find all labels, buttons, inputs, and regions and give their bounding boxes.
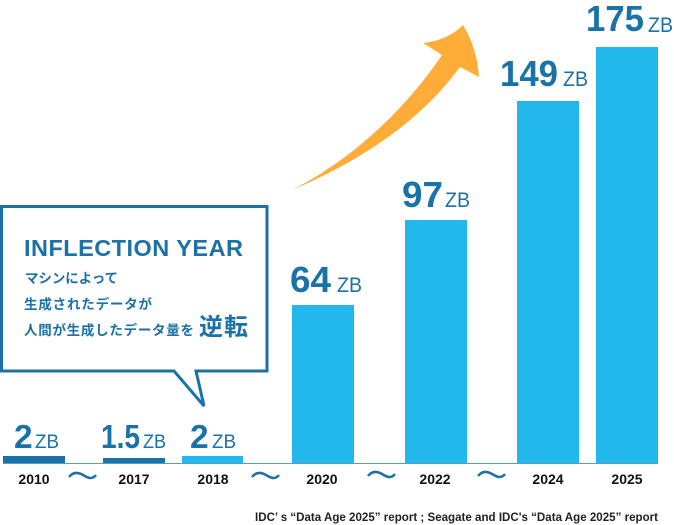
- value label: 2022: 97: [402, 174, 443, 215]
- value label: 2017: 1.5: [101, 419, 140, 456]
- callout heading: INFLECTION YEAR: [24, 235, 243, 261]
- year labels: 2010: [18, 471, 50, 487]
- bar chart: [3, 47, 658, 463]
- callout text: マシンによって: [25, 271, 118, 286]
- value label: 2020: 64: [290, 259, 331, 300]
- value label: 2010: [14, 419, 59, 456]
- year labels: 2020: [306, 471, 338, 487]
- value label: 2022: [402, 174, 470, 215]
- source note: IDC’ s “Data Age 2025” report ; Seagate and IDC's “Data Age 2025” report: [255, 510, 658, 524]
- value label: 2010: ZB: [35, 432, 59, 453]
- callout: [2, 206, 267, 406]
- value label: 2018: ZB: [212, 432, 236, 453]
- callout text: [24, 271, 248, 341]
- value label: 2018: 2: [190, 419, 209, 456]
- value label: 2024: [500, 53, 588, 94]
- icon: tilde separators: [69, 472, 505, 478]
- year labels: 2017: [118, 471, 150, 487]
- value label: 2024: 149: [500, 53, 558, 94]
- baseline axis: [3, 463, 658, 464]
- arrow: growth: [292, 25, 479, 190]
- callout text: 逆転: [199, 314, 248, 341]
- value label: 2020: ZB: [337, 274, 362, 297]
- callout text: 人間が生成したデータ量を: [24, 322, 194, 338]
- year labels: 2025: [611, 471, 643, 487]
- year labels: 2022: [419, 471, 451, 487]
- year labels: [18, 471, 643, 487]
- value label: 2024: ZB: [563, 68, 588, 91]
- value label: 2020: [290, 259, 362, 300]
- callout text: 生成されたデータが: [24, 296, 152, 312]
- value label: 2025: [586, 0, 673, 39]
- year labels: 2024: [532, 471, 564, 487]
- value label: 2010: 2: [14, 419, 33, 456]
- value label: 2018: [190, 419, 236, 456]
- value label: 2017: ZB: [143, 432, 166, 453]
- year labels: 2018: [197, 471, 229, 487]
- value label: 2022: ZB: [445, 189, 470, 212]
